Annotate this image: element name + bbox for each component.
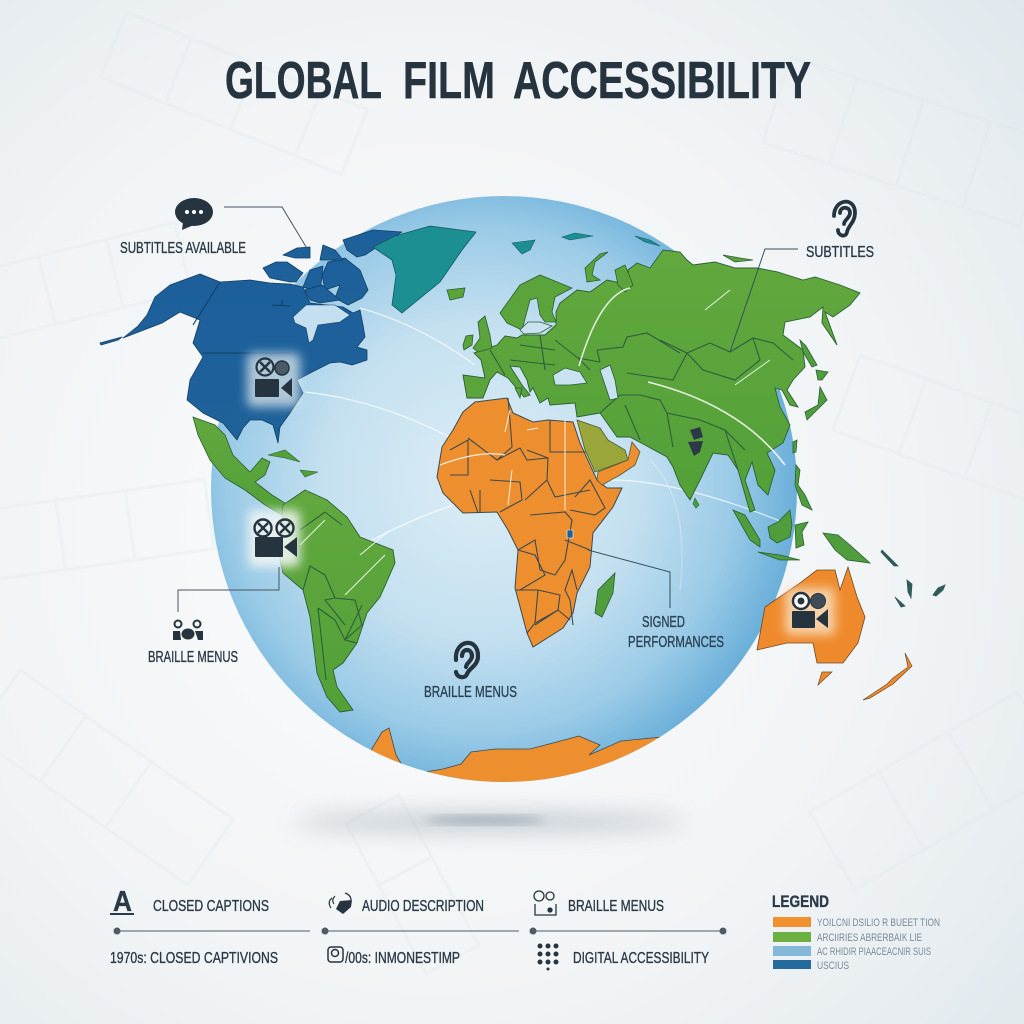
callout: subtitles with ear icon: SUBTITLES xyxy=(806,244,874,261)
icon: film camera over South America xyxy=(248,510,300,567)
continent: Greenland xyxy=(373,226,476,313)
timeline: DIGITAL ACCESSIBILITY xyxy=(573,950,709,967)
callout: signed performances: SIGNED xyxy=(642,614,685,631)
continent: Australia xyxy=(757,567,865,663)
icon: ear xyxy=(456,643,478,677)
legend: AC RHIDIR PIAACEACNIR SUIS xyxy=(817,946,931,958)
timeline: CLOSED CAPTIONS xyxy=(153,898,269,915)
legend: ARCIIRIES ABRERBAIK LIE xyxy=(817,932,922,944)
icon: film camera over Australia xyxy=(785,588,835,635)
callout: signed performances: PERFORMANCES xyxy=(628,634,724,651)
callout: subtitles with ear icon xyxy=(730,202,874,352)
North America border xyxy=(193,282,290,353)
icon: audio description xyxy=(329,893,352,914)
continent: South America xyxy=(280,490,395,712)
continent: Antarctica xyxy=(370,727,660,782)
title: FILM xyxy=(403,52,495,110)
callout: subtitles available: SUBTITLES AVAILABLE xyxy=(120,240,246,257)
title: ACCESSIBILITY xyxy=(513,52,811,110)
flight arcs behind land xyxy=(305,308,790,590)
icon: ear xyxy=(834,202,855,236)
islands: Svalbard and Arctic xyxy=(512,233,660,254)
legend: USCIUS xyxy=(817,960,849,972)
islands: Tasmania and New Zealand xyxy=(818,653,912,700)
ocean disc xyxy=(211,196,797,782)
Oceania and Asian islands outside the globe xyxy=(733,340,945,700)
continent: North America xyxy=(100,230,402,443)
island: Sri Lanka xyxy=(693,498,699,508)
callout: subtitles available xyxy=(120,198,308,257)
islands: Southeast Asia and Japan xyxy=(733,340,870,563)
continent: Africa xyxy=(437,398,622,647)
title xyxy=(225,52,811,110)
callout: braille menus left: BRAILLE MENUS xyxy=(148,649,238,666)
timeline: BRAILLE MENUS xyxy=(568,898,664,915)
globe shadow xyxy=(295,813,685,831)
Arabian Peninsula xyxy=(577,420,640,485)
timeline: /00s: INMONESTIMP xyxy=(345,950,460,967)
callout: braille menus centre xyxy=(424,643,517,701)
continent: Eurasia xyxy=(463,250,860,512)
callout: signed performances xyxy=(588,550,724,651)
flight arcs over land xyxy=(300,288,785,595)
Caribbean islands xyxy=(268,450,318,477)
globe map xyxy=(100,196,860,790)
icon: letter A: A xyxy=(113,886,132,918)
title: GLOBAL xyxy=(225,52,382,110)
callout: braille menus centre: BRAILLE MENUS xyxy=(424,684,517,701)
islands: Pacific xyxy=(881,550,945,607)
islands: Europe and Arctic xyxy=(447,252,753,398)
timeline xyxy=(110,886,726,970)
timeline rules xyxy=(114,928,726,934)
icon: dots keypad xyxy=(538,944,558,970)
timeline: AUDIO DESCRIPTION xyxy=(362,898,484,915)
legend: LEGEND xyxy=(772,892,829,911)
island: Madagascar xyxy=(595,573,615,617)
Hudson Bay xyxy=(293,305,350,343)
legend: YOILCNI DSILIO R BUEET TION xyxy=(817,917,940,929)
icon: tablet xyxy=(328,947,343,962)
icon: film camera over North America xyxy=(247,353,300,407)
icon: speech bubble xyxy=(175,198,213,230)
legend xyxy=(772,892,940,972)
sea: Black Sea, Caspian and Baltic xyxy=(520,322,618,400)
icon: people xyxy=(173,620,203,640)
callout: braille menus left xyxy=(148,567,279,666)
icon: braille menu xyxy=(534,891,556,915)
timeline: 1970s: CLOSED CAPTIVIONS xyxy=(110,950,278,967)
continent: Central America xyxy=(193,417,290,515)
